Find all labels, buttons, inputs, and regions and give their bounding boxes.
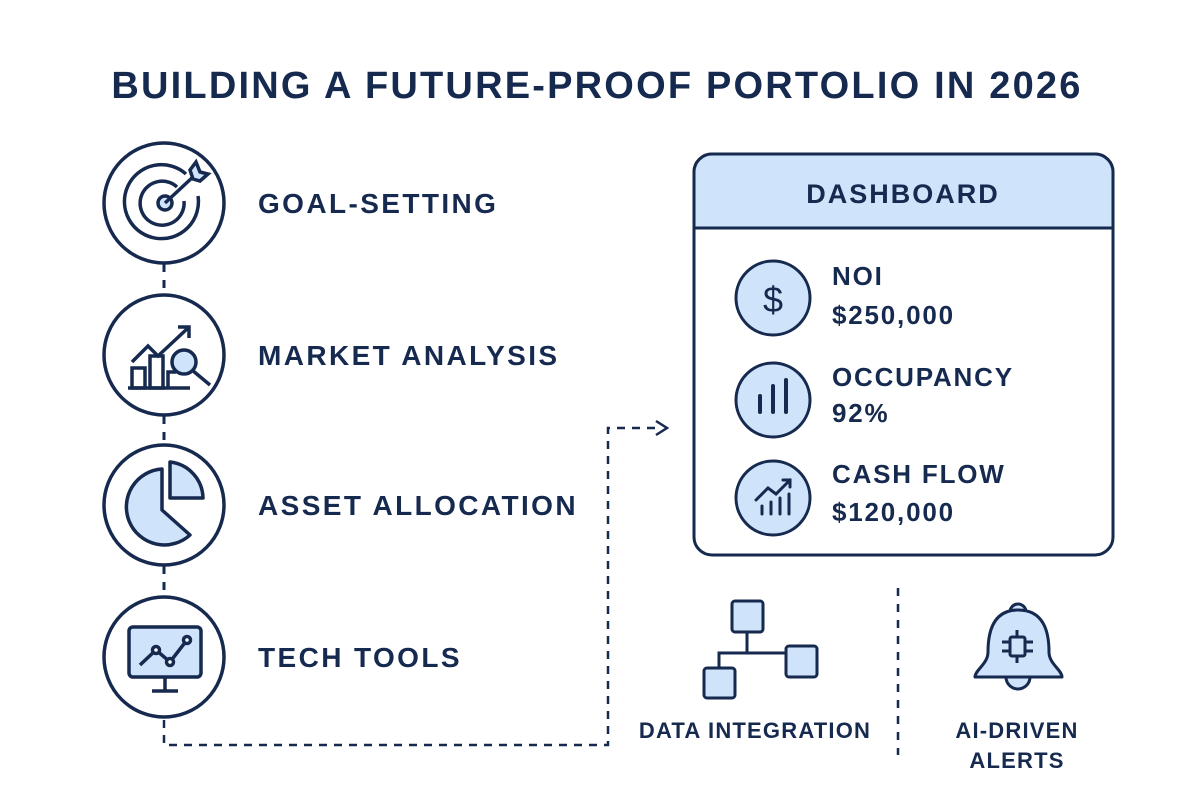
icon: monitor <box>129 627 201 691</box>
label: MARKET ANALYSIS <box>258 340 560 371</box>
icon: target <box>124 162 208 239</box>
step: goal-setting <box>104 143 498 263</box>
feature: AI-driven alerts: ALERTS <box>969 748 1065 773</box>
metric: occupancy: 92% <box>832 398 889 428</box>
icon: pie chart <box>126 462 203 545</box>
label: TECH TOOLS <box>258 642 462 673</box>
icon: network nodes <box>704 601 817 698</box>
icon: chart with magnifier <box>128 327 210 388</box>
metric: NOI: $250,000 <box>832 300 955 330</box>
metric: cash flow: CASH FLOW <box>832 459 1006 489</box>
feature: AI-driven alerts <box>955 604 1079 773</box>
heading: DASHBOARD <box>806 179 1000 209</box>
metric: cash flow <box>736 459 1006 535</box>
panel: dashboard <box>694 154 1113 555</box>
feature: AI-driven alerts: AI-DRIVEN <box>955 718 1079 743</box>
icon: bell with chip <box>975 604 1062 689</box>
title: BUILDING A FUTURE-PROOF PORTOLIO IN 2026 <box>111 65 1083 107</box>
connector dashes between steps <box>162 264 166 596</box>
step: tech tools <box>104 597 462 717</box>
step: market analysis <box>104 295 560 415</box>
label: ASSET ALLOCATION <box>258 490 578 521</box>
metric: occupancy <box>736 362 1014 437</box>
feature: data integration: DATA INTEGRATION <box>639 718 871 743</box>
divider <box>897 588 899 755</box>
feature: data integration <box>639 601 871 743</box>
metric: cash flow: $120,000 <box>832 497 955 527</box>
label: GOAL-SETTING <box>258 188 498 219</box>
metric: occupancy: OCCUPANCY <box>832 362 1014 392</box>
metric: NOI: $ <box>763 279 783 320</box>
metric: NOI <box>736 261 955 335</box>
step: asset allocation <box>104 445 578 565</box>
metric: NOI: NOI <box>832 261 884 291</box>
arrow: dashed path to dashboard <box>164 421 667 745</box>
